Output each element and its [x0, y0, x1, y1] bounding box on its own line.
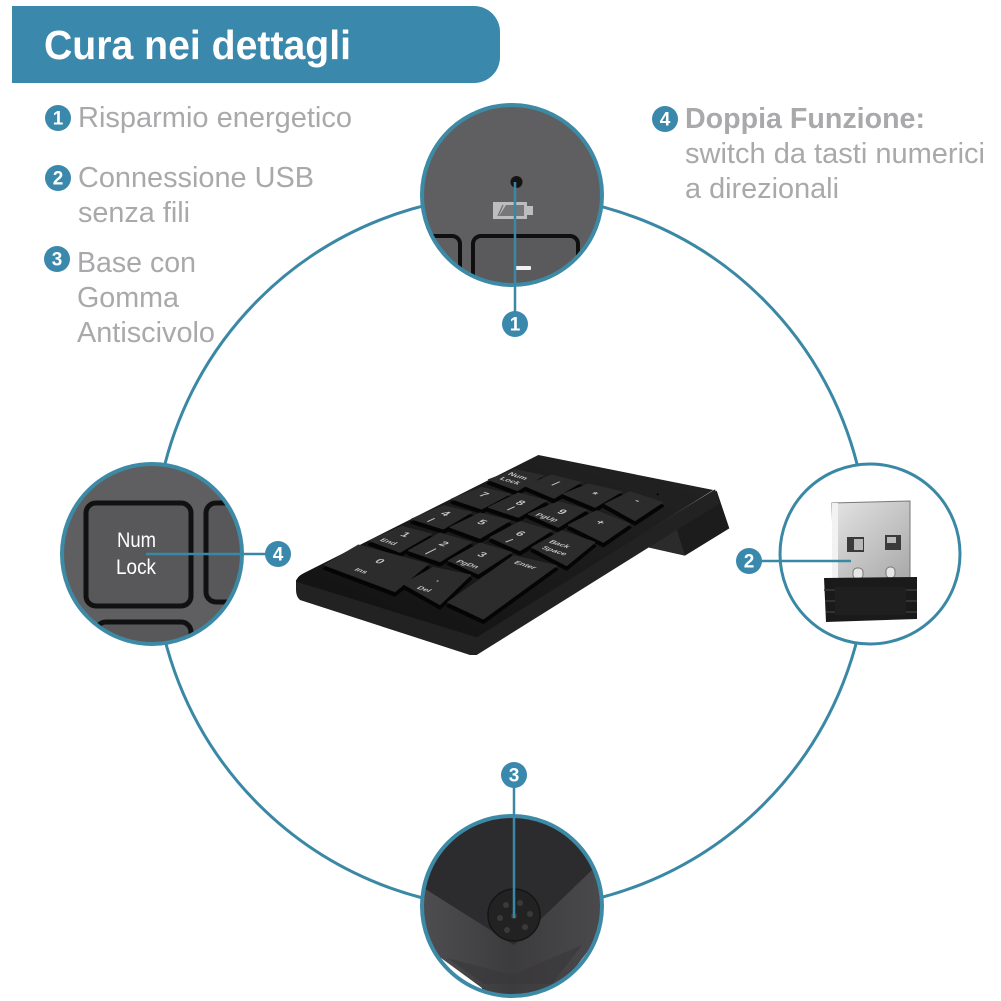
detail circle: USB receiver: [780, 464, 960, 644]
feature 2: Connessione USB: [78, 162, 314, 194]
feature 3: Gomma: [77, 282, 180, 314]
key legends: Ins: [352, 567, 370, 575]
key legends: /: [549, 480, 561, 487]
title banner: Cura nei dettagli: [44, 22, 351, 68]
feature 2: senza fili: [78, 197, 190, 229]
wedge stand: [648, 491, 729, 556]
keypad illustration: [296, 455, 729, 655]
callout 3: 3: [509, 766, 519, 786]
detail circle: battery indicator: [420, 103, 604, 287]
key legends: +: [592, 519, 609, 527]
key legends: Lock: [498, 476, 524, 486]
title banner: [12, 6, 500, 83]
detail circle: num lock key: Num: [117, 529, 156, 552]
feature 3: Base con: [77, 247, 196, 279]
key legends: 8: [512, 499, 528, 507]
key legends: 7: [475, 491, 491, 499]
battery icon: [493, 202, 533, 219]
key legends: Back: [547, 539, 573, 550]
LED hole: [510, 176, 522, 188]
feature 1: Risparmio energetico: [78, 102, 352, 134]
feature 4: right text block: switch da tasti numerici: [685, 138, 985, 170]
USB metal plug: [832, 501, 910, 580]
callout 2: 2: [744, 552, 754, 572]
key legends: Num: [506, 471, 530, 481]
callout 1: [502, 182, 528, 337]
key legends: 4: [437, 510, 454, 518]
key legends: .: [433, 576, 446, 583]
detail circle: anti-slip rubber foot: [415, 810, 610, 1000]
feature 4: right text block: a direzionali: [685, 173, 839, 205]
key bases: [324, 473, 663, 623]
callout 3: [501, 762, 527, 918]
status LED: [657, 493, 659, 495]
key legends: 3: [474, 551, 489, 559]
feature 3: Antiscivolo: [77, 317, 215, 349]
key legends: End: [378, 537, 400, 546]
feature 2: 2: [53, 168, 63, 190]
feature 3: 3: [52, 250, 62, 270]
feature 4: right text block: [652, 103, 985, 205]
key legends: [352, 471, 644, 593]
key legends: 9: [554, 508, 569, 516]
feature 1: 1: [53, 108, 64, 130]
rubber foot: [488, 889, 540, 941]
feature list: left: [44, 102, 352, 349]
feature 2: [45, 162, 314, 229]
key legends: 1: [397, 531, 413, 539]
key legends: Space: [539, 545, 570, 557]
key legends: *: [586, 491, 601, 498]
key legends: Enter: [512, 560, 539, 570]
large connecting ring: [154, 195, 868, 909]
key legends: 0: [371, 558, 387, 565]
top plate: [296, 455, 713, 637]
USB black housing: [824, 577, 917, 622]
key legends: PgDn: [454, 559, 482, 570]
feature 4: right text block: 4: [660, 110, 671, 130]
callout 1: 1: [510, 314, 521, 336]
key legends: 2: [435, 540, 451, 548]
key tops: [324, 470, 663, 619]
callout 2: [736, 548, 851, 574]
feature 4: right text block: Doppia Funzione:: [685, 103, 925, 135]
feature 3: [44, 246, 215, 349]
detail circle: num lock key: [60, 462, 244, 646]
detail circle: num lock key: Lock: [116, 556, 156, 579]
key legends: PgUp: [533, 512, 561, 523]
callout 4: 4: [273, 544, 284, 566]
front lip: [296, 489, 720, 655]
key arrows: [425, 507, 515, 554]
key legends: Del: [415, 585, 434, 593]
key legends: 6: [512, 530, 528, 538]
key legends: -: [631, 497, 644, 504]
callout 4: [146, 541, 291, 567]
key legends: 5: [474, 519, 489, 526]
